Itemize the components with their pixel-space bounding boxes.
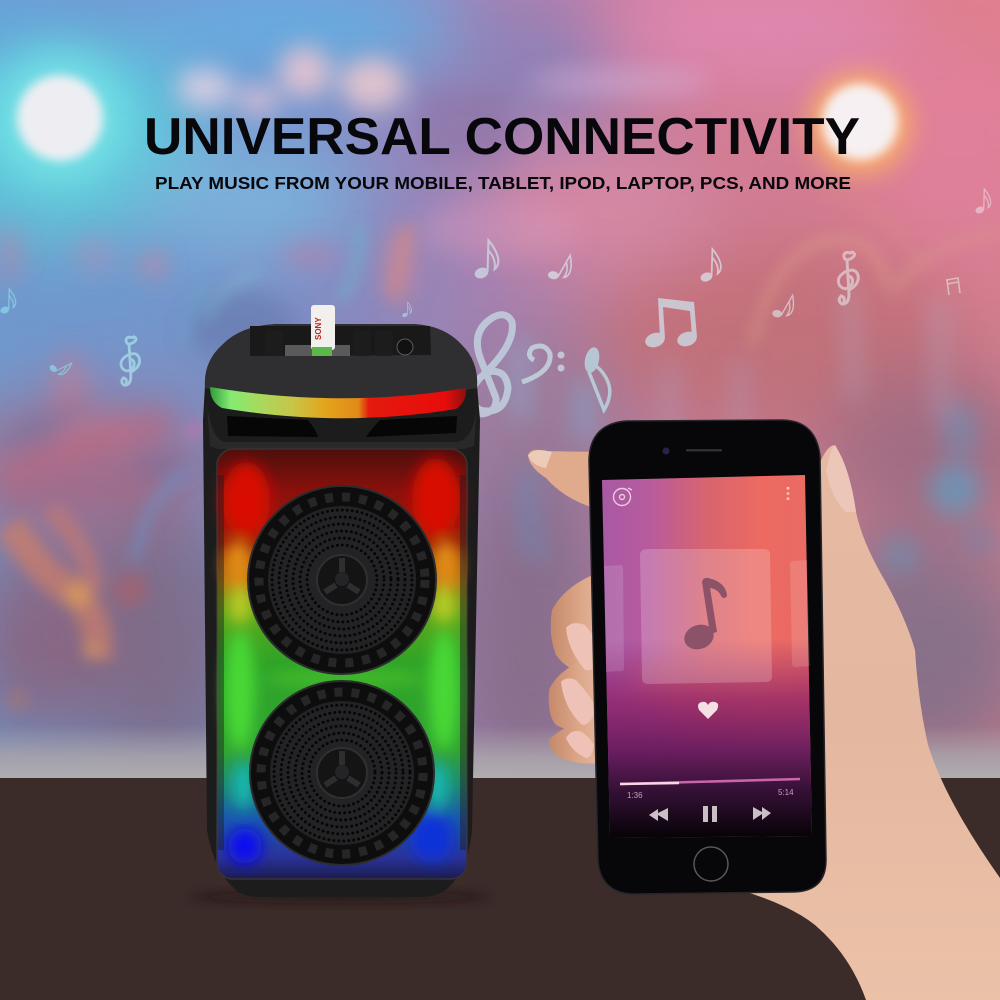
icon: large treble clef bbox=[471, 315, 512, 414]
thumb nail bbox=[826, 445, 856, 512]
speaker control recess bbox=[250, 326, 431, 356]
palm and wrist bbox=[740, 445, 1000, 1000]
speaker front panel bbox=[217, 449, 467, 879]
index finger bbox=[528, 450, 600, 510]
blue streaks bbox=[135, 470, 188, 560]
speaker usb drive: SONY bbox=[314, 317, 323, 340]
floor bbox=[0, 778, 1000, 1000]
stage lights cluster bbox=[177, 68, 233, 108]
blurred concert background bbox=[0, 0, 1000, 780]
phone bbox=[589, 420, 826, 894]
speaker body bbox=[203, 385, 480, 897]
hand bbox=[528, 445, 1000, 1000]
phone camera and earpiece bbox=[662, 448, 722, 454]
speaker vents bbox=[227, 416, 457, 437]
subtitle: PLAY MUSIC FROM YOUR MOBILE, TABLET, IPOD, LAPTOP, PCS, AND MORE bbox=[155, 173, 851, 193]
speaker top cap bbox=[205, 324, 477, 400]
icon: rewind bbox=[649, 808, 668, 821]
album card bbox=[640, 549, 772, 684]
index fingernail bbox=[528, 450, 552, 468]
phone home button bbox=[694, 847, 728, 881]
icon: vinyl bbox=[614, 488, 632, 506]
head rim light bbox=[752, 240, 885, 345]
icon: small beamed notes bbox=[946, 278, 960, 295]
track elapsed time: 1:36 bbox=[627, 791, 643, 800]
album card side left bbox=[604, 565, 624, 672]
crowd silhouettes bbox=[185, 290, 295, 360]
icon: bass clef bbox=[522, 346, 564, 382]
fingernails bbox=[561, 623, 603, 758]
progress bar bbox=[620, 779, 800, 784]
icon: forward bbox=[753, 807, 771, 820]
phone screen bbox=[602, 475, 812, 838]
little finger bbox=[549, 720, 608, 764]
spotlight right bbox=[808, 72, 912, 176]
spotlight left bbox=[0, 50, 128, 186]
title: UNIVERSAL CONNECTIVITY bbox=[144, 108, 860, 166]
floating music notes bbox=[0, 189, 991, 414]
speaker LED strip bbox=[210, 387, 466, 418]
woofer bottom bbox=[250, 681, 434, 865]
icon: tilted note bbox=[582, 346, 610, 410]
woofer top bbox=[248, 486, 436, 674]
track end time: 5:14 bbox=[778, 788, 794, 797]
icon: beamed notes bbox=[643, 298, 699, 350]
icon: music note on card bbox=[681, 578, 727, 653]
album card side right bbox=[790, 560, 810, 667]
speaker usb drive bbox=[311, 305, 335, 356]
speaker shadow bbox=[190, 891, 490, 903]
icon: menu dots bbox=[787, 487, 789, 500]
orange flare bbox=[10, 525, 98, 660]
ring finger bbox=[549, 655, 606, 735]
middle finger bbox=[551, 572, 610, 682]
speaker bbox=[190, 305, 490, 903]
icon: heart bbox=[698, 702, 718, 719]
icon: pause bbox=[703, 806, 717, 822]
